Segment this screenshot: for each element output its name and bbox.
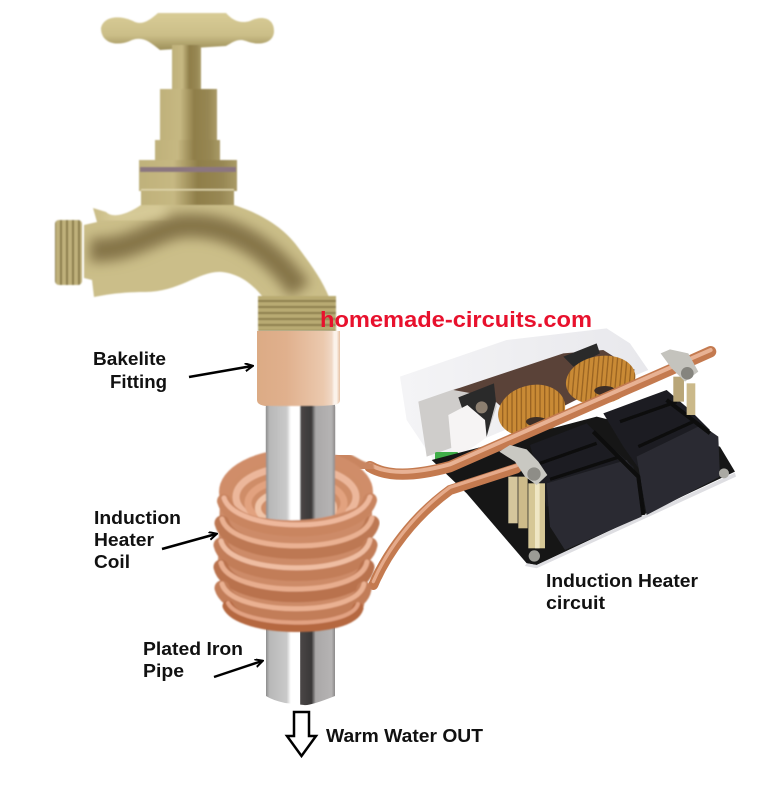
tube clamp rear — [661, 349, 698, 382]
icon: faucet handle — [101, 13, 274, 50]
brown rear board — [453, 350, 635, 427]
label: Induction Heater circuit — [546, 571, 698, 613]
label: Induction Heater Coil: Coil — [94, 552, 130, 572]
label: Induction Heater Coil — [94, 508, 181, 572]
arrow: to bakelite fitting — [189, 366, 252, 377]
induction heater circuit — [370, 328, 736, 585]
arrow: to pipe — [214, 661, 262, 677]
mounting screws — [476, 401, 729, 562]
coil inner back turns — [224, 454, 368, 530]
label: Induction Heater circuit: Induction Heater — [546, 571, 698, 591]
label: Induction Heater Coil: Induction — [94, 508, 181, 528]
label: Plated Iron Pipe: Pipe — [143, 661, 184, 681]
plated iron pipe lower — [266, 620, 335, 705]
label: Induction Heater circuit: circuit — [546, 593, 605, 613]
watermark: homemade-circuits.com — [320, 307, 592, 332]
grey front plate — [418, 383, 497, 457]
label: Bakelite Fitting: Fitting — [110, 372, 167, 392]
faucet stem — [172, 45, 201, 90]
copper lead tubes — [370, 350, 711, 585]
brass standoffs — [508, 377, 695, 548]
brass faucet — [55, 13, 340, 331]
label: Bakelite Fitting: Bakelite — [93, 349, 166, 369]
label: Warm Water OUT: Warm Water OUT — [326, 726, 483, 746]
circuit board — [432, 417, 735, 565]
toroid left — [492, 377, 571, 444]
inlet thread — [55, 220, 82, 285]
white terminal block — [448, 405, 487, 453]
toroid right — [562, 350, 639, 410]
coil body — [218, 500, 372, 628]
capacitors — [530, 390, 720, 550]
faucet body and spout — [83, 204, 329, 298]
induction heater coil — [218, 406, 372, 628]
pipe inside coil — [266, 406, 335, 524]
label: Bakelite Fitting — [93, 349, 167, 392]
faucet bonnet — [155, 89, 220, 161]
outlet thread — [258, 296, 336, 331]
label: Plated Iron Pipe: Plated Iron — [143, 639, 243, 659]
coil front turns — [221, 497, 372, 627]
bakelite fitting — [257, 331, 340, 407]
plated iron pipe upper — [266, 400, 335, 530]
arrow: water flow down — [287, 712, 316, 756]
heatsink — [400, 328, 648, 460]
arrow: to coil — [162, 534, 216, 549]
green LED — [435, 452, 458, 461]
faucet collar — [139, 160, 237, 208]
tube clamp front — [499, 445, 547, 485]
rear coil lead — [335, 456, 374, 468]
dark clips — [458, 343, 600, 437]
label: Induction Heater Coil: Heater — [94, 530, 154, 550]
label: Plated Iron Pipe — [143, 639, 243, 681]
